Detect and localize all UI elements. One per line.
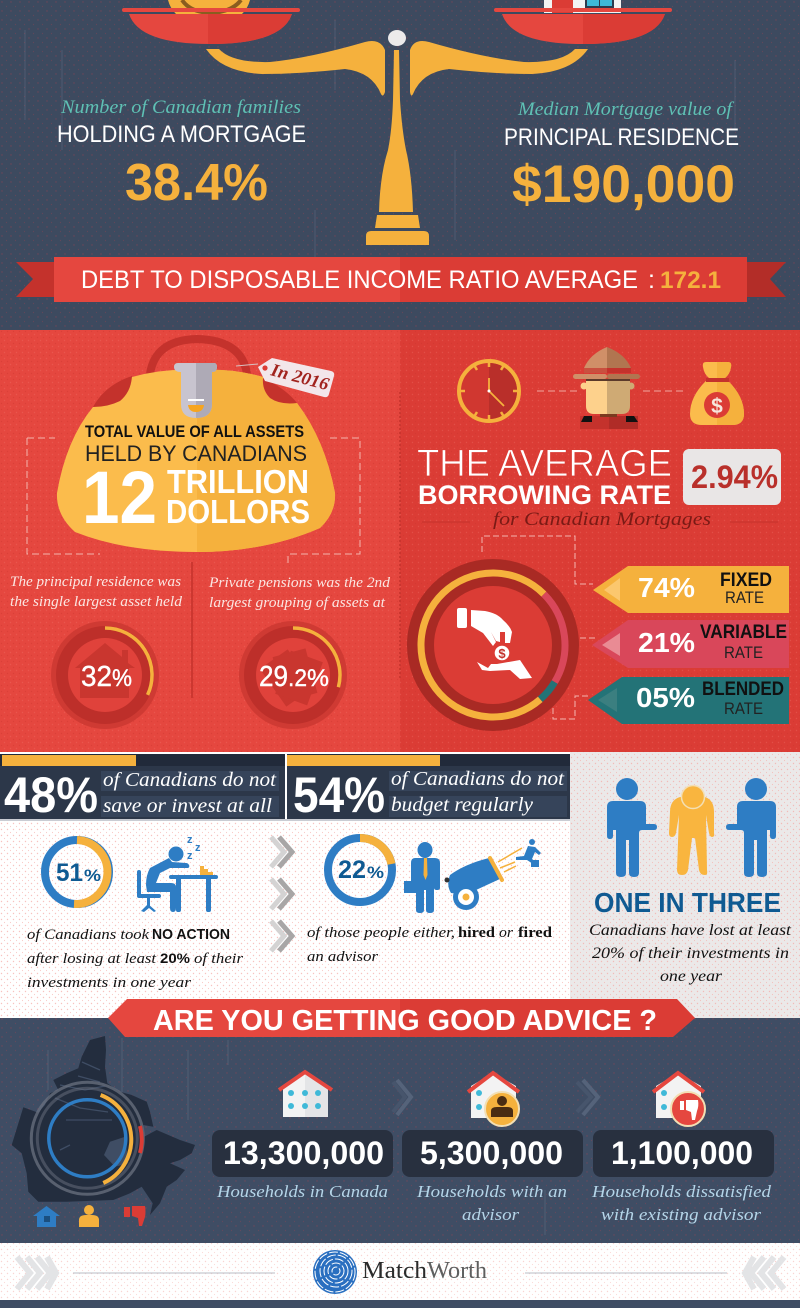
right pan [494,8,672,44]
label: PRINCIPAL RESIDENCE [504,124,739,151]
stat: households with advisor: advisor [462,1205,519,1224]
line 1: THE AVERAGE [417,443,672,485]
teal segment: blended [540,682,555,699]
panel: footer background [0,1243,800,1308]
line 2: HELD BY CANADIANS [85,441,307,466]
illustration: balance scale [122,0,672,245]
icon: person [79,1205,99,1227]
icon: advisor with briefcase [404,842,440,913]
logo: wordmark: Match [362,1258,427,1284]
left pan [122,8,300,44]
icon: money bag: $ [711,395,723,418]
panel: one in three background [570,752,800,1018]
chart: 22 percent donut [328,838,392,902]
tag: fixed rate [593,566,789,613]
left arm [206,41,385,96]
sleep marks: z [187,850,193,862]
text: no action: of Canadians took [27,927,149,943]
value: 32 [81,661,112,693]
icon: house on right pan [544,0,621,13]
tag: variable rate [592,620,789,668]
stat: households with advisor: 5,300,000 [420,1135,563,1171]
value: 29 [259,661,288,693]
value: % [112,665,132,692]
arc [293,628,340,687]
line 1: TOTAL VALUE OF ALL ASSETS [85,422,304,441]
progress bar [2,755,136,766]
chart: 29.2 percent ring [239,621,347,729]
bag body [57,370,335,552]
text: hired or fired: fired [518,925,553,941]
panel: advice section background [0,1018,800,1243]
tag text: In 2016 [268,359,331,394]
clasp [174,363,217,418]
text: no action: NO ACTION [152,926,230,943]
icon: house with advisor [468,1073,519,1126]
icon: coin on left pan [168,0,250,14]
text: hired or fired: hired [458,925,496,941]
heading: average borrowing rate [417,443,781,530]
logo: wordmark: Worth [427,1258,487,1284]
icon: house [33,1206,60,1227]
rings [31,1082,143,1194]
bag heading [82,422,310,539]
caption: Number of Canadian families [60,97,301,118]
text: private pensions: Private pensions was the 2nd [208,575,391,591]
text: lost investments: 20% of their investments in [592,945,789,962]
chart: 32 percent ring [51,621,159,729]
column [379,50,413,212]
arrow: chevron one [393,1080,411,1115]
stat: median mortgage [504,99,739,214]
base [366,215,429,245]
line 2: BORROWING RATE [418,480,671,510]
stat: households with advisor [402,1130,583,1224]
footer: chevrons left [17,1257,56,1289]
stat: households in Canada: 13,300,000 [223,1135,384,1171]
value: .2 [288,665,307,692]
chart: 22 percent donut: 22 [338,856,366,884]
text: no action: 20% [160,950,191,966]
sleep marks: z [195,842,201,854]
icon: house [75,643,135,698]
icon: house with thumbs down [653,1073,705,1126]
description: of Canadians do not [391,768,564,790]
arrow: chevron two [577,1080,598,1115]
panel: white stats background [0,752,570,1018]
value [81,661,132,693]
panel: 54 percent stat [287,754,570,823]
stat: households dissatisfied [591,1130,774,1224]
tag: blended rate: RATE [724,699,763,718]
yellow segment: fixed [421,573,544,717]
progress bar [287,755,440,766]
panel: 48 percent stat: save or invest at all [103,795,272,817]
bag handle [150,339,247,374]
dollors: DOLLORS [166,493,310,530]
description: of Canadians do not [103,769,276,791]
stat: households dissatisfied: with existing advisor [601,1205,761,1224]
tag: variable rate: 21% [638,627,695,658]
banner text: DEBT TO DISPOSABLE INCOME RATIO AVERAGE [81,266,638,294]
text: principal residence: the single largest asset held [10,594,183,610]
stat: households in Canada: Households in Canada [216,1182,388,1201]
text: hired or fired: an advisor [307,949,378,965]
footer: chevrons right [745,1257,784,1289]
caption: Median Mortgage value of [517,99,735,120]
text: hired or fired: of those people either, [307,925,455,941]
tag: blended rate: BLENDED [702,679,784,700]
tag: fixed rate: FIXED [720,570,772,591]
icon: chevrons [271,837,292,951]
Hudson Bay [104,1137,128,1167]
rate: 2.94% [691,459,778,495]
bag shoulder right [263,378,297,403]
stat: families holding a mortgage [57,97,306,212]
banner: debt ratio [16,257,786,302]
chart: 51 percent donut [45,840,109,904]
icon: hand and coin: $ [498,646,506,661]
pivot [388,30,406,46]
rate box [683,449,781,505]
logo: wordmark [362,1258,487,1284]
icon: money bag [690,362,744,425]
text: private pensions: largest grouping of assets at [209,595,386,611]
icon: mountie [573,347,640,429]
value: % [307,665,329,692]
text: hired or fired: or [499,925,513,941]
text: principal residence: The principal residence was [10,574,181,590]
flying person [498,848,522,872]
tag: variable rate: VARIABLE [700,622,787,643]
logo: fingerprint [313,1250,357,1294]
panel: 48 percent stat [0,754,285,823]
tag: fixed rate: 74% [638,572,695,603]
banner: good advice [108,999,695,1037]
banner value: 172.1 [660,267,721,294]
text: no action: of their [194,951,243,967]
tag: blended rate [588,677,789,724]
text: lost investments: one year [660,968,723,985]
label: HOLDING A MORTGAGE [57,121,306,148]
map: Canada with rings [12,1036,195,1227]
panel: 54 percent stat: budget regularly [391,794,533,816]
text: no action [27,926,243,991]
icon: hand and coin [457,608,532,679]
sleep marks [187,834,201,862]
text: lost investments: Canadians have lost at least [589,922,792,939]
icon: banknotes [260,648,323,707]
arc [105,628,152,695]
stat: households dissatisfied: 1,100,000 [611,1135,753,1171]
illustration: asset bag [57,339,335,552]
text: hired or fired [307,925,553,965]
tag: blended rate: 05% [636,682,695,713]
value: 38.4% [125,154,268,212]
icon: three people [607,778,776,877]
number: 12 [82,456,157,539]
chart: 22 percent donut: % [367,863,384,882]
text: private pensions [208,575,391,611]
coins [200,866,213,875]
subtitle: for Canadian Mortgages [493,509,711,530]
text: lost investments [589,922,792,985]
tag: variable rate: RATE [724,643,763,662]
text: no action: after losing at least [27,951,157,967]
price tag [236,358,334,397]
bag shoulder left [93,376,132,407]
banner text: ARE YOU GETTING GOOD ADVICE ? [153,1005,657,1037]
pink segment: variable [544,594,565,682]
chart: 51 percent donut: % [84,866,101,885]
icon: thumbs down [124,1206,146,1226]
stat: households dissatisfied: Households dissatisfied [591,1182,772,1201]
value [259,661,329,693]
heading: one in three: ONE IN THREE [594,887,781,918]
text: principal residence [10,574,183,610]
panel: scale section background [0,0,800,330]
tag: fixed rate: RATE [725,588,764,607]
right arm [410,41,588,96]
stat: households with advisor: Households with an [416,1182,567,1201]
icon: cannon firing advisor [444,839,541,910]
chart: 51 percent donut: 51 [56,859,83,887]
trillion: TRILLION [167,463,309,500]
icon: clock [459,361,519,421]
value: 48% [4,767,98,823]
chart: mortgage rate donut [407,559,579,731]
icon: person asleep at desk [137,834,218,912]
value: $190,000 [512,155,735,214]
icon: house one [279,1072,332,1117]
dashed frame around bag [27,438,360,565]
panel: red left background [0,330,400,752]
panel: red right background [400,330,800,752]
value: 54% [293,767,385,823]
sleep marks: z [187,834,193,846]
colon: : [648,266,655,294]
text: no action: investments in one year [27,975,191,991]
stat: households in Canada [212,1130,393,1201]
